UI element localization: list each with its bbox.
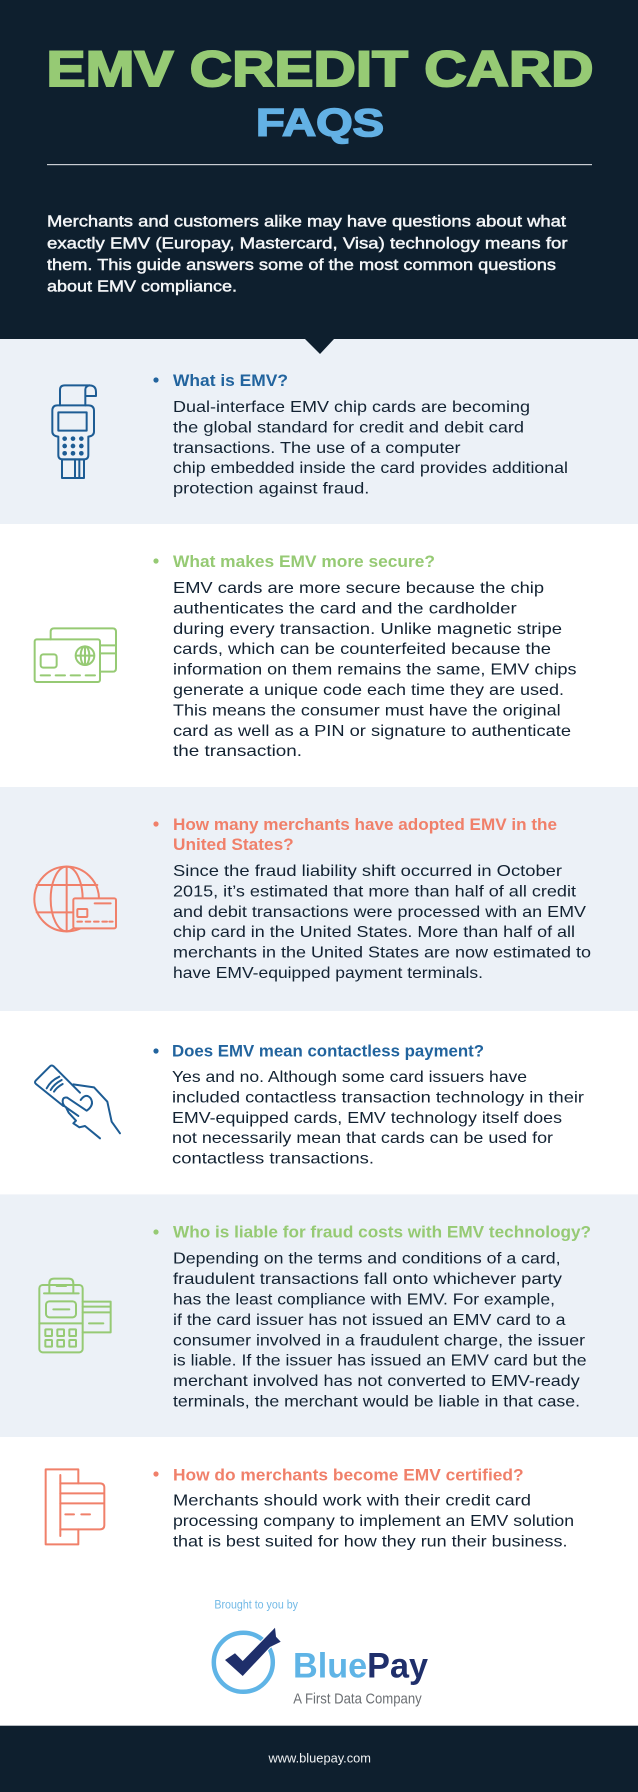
heading: What is EMV? [173,372,288,390]
icon: globe with card [34,867,116,931]
answer text: transactions. The use of a computer [173,440,461,457]
answer text: merchant involved has not converted to EMV-ready [173,1373,580,1390]
footer [0,1726,638,1792]
heading: What makes EMV more secure? [173,553,435,571]
answer text: included contactless transaction technology in their [172,1089,585,1106]
answer text: Depending on the terms and conditions of a card, [173,1251,561,1268]
icon: card terminal with card [39,1279,111,1352]
answer text: consumer involved in a fraudulent charge, the issuer [173,1332,586,1349]
answer text: processing company to implement an EMV solution [173,1513,574,1530]
answer text [173,399,568,498]
answer text: information on them remains the same, EMV chips [173,662,576,679]
panel: EMV certification [0,1437,638,1577]
answer text: not necessarily mean that cards can be used for [172,1130,554,1147]
answer text: 2015, it’s estimated that more than half of all credit [173,883,577,900]
answer text: has the least compliance with EMV. For example, [173,1292,555,1308]
answer text: fraudulent transactions fall onto whichever party [173,1271,562,1288]
subtitle: FAQS [256,102,384,145]
panel: what is EMV [0,339,638,524]
answer text: cards, which can be counterfeited because the [173,641,551,658]
answer text: if the card issuer has not issued an EMV card to a [173,1312,566,1329]
answer text: protection against fraud. [173,481,369,498]
answer text: EMV cards are more secure because the chip [173,580,544,597]
panel: header [0,0,638,339]
answer text: and debit transactions were processed with an EMV [173,904,586,921]
answer text: the global standard for credit and debit card [173,419,524,436]
icon: hand holding card [35,1065,120,1138]
answer text: Dual-interface EMV chip cards are becoming [173,399,530,416]
website: www.bluepay.com [267,1752,371,1766]
answer text: terminals, the merchant would be liable in that case. [173,1394,580,1410]
icon: payment terminal [52,385,96,478]
answer text: chip card in the United States. More than half of all [173,924,575,941]
answer text: chip embedded inside the card provides additional [173,460,568,477]
answer text: have EMV-equipped payment terminals. [173,965,483,982]
icon: card in reader [46,1469,104,1544]
panel: merchant adoption [0,787,638,1011]
intro paragraph: them. This guide answers some of the most common questions [47,257,556,274]
heading: Does EMV mean contactless payment? [172,1043,484,1061]
title: EMV CREDIT CARD [46,41,594,97]
panel: what makes EMV more secure [0,524,638,787]
intro paragraph: Merchants and customers alike may have questions about what [47,214,567,231]
answer text: that is best suited for how they run their business. [173,1534,568,1550]
answer text: merchants in the United States are now estimated to [173,945,591,962]
answer text: authenticates the card and the cardholder [173,600,517,617]
answer text [173,1493,574,1550]
tagline: A First Data Company [293,1690,422,1707]
heading: Who is liable for fraud costs with EMV technology? [173,1224,591,1242]
answer text [172,1069,585,1168]
answer text: contactless transactions. [172,1151,374,1168]
answer text: This means the consumer must have the original [173,702,561,719]
answer text [173,1251,587,1410]
answer text: Yes and no. Although some card issuers have [172,1069,527,1086]
answer text: generate a unique code each time they are used. [173,682,564,699]
answer text: during every transaction. Unlike magnetic stripe [173,621,562,638]
heading: United States? [173,836,294,854]
answer text: card as well as a PIN or signature to authenticate [173,723,571,740]
credit line: Brought to you by [214,1599,298,1611]
answer text: the transaction. [173,743,302,760]
answer text [173,863,591,982]
wordmark: BluePay [293,1646,429,1685]
answer text: EMV-equipped cards, EMV technology itself does [172,1110,562,1127]
heading [173,816,557,854]
answer text: is liable. If the issuer has issued an EMV card but the [173,1353,587,1370]
intro paragraph: about EMV compliance. [47,279,237,296]
heading: How many merchants have adopted EMV in the [173,816,557,834]
answer text: Since the fraud liability shift occurred in October [173,863,563,880]
arrow: header pointer [305,339,334,354]
panel: fraud liability [0,1194,638,1437]
heading: How do merchants become EMV certified? [173,1466,524,1484]
icon: check mark in ring [214,1628,281,1692]
answer text [173,580,576,760]
answer text: Merchants should work with their credit card [173,1493,531,1510]
icon: credit cards [35,628,116,682]
logo: BluePay [214,1628,429,1707]
panel: contactless payment [0,1011,638,1194]
intro paragraph: exactly EMV (Europay, Mastercard, Visa) technology means for [47,235,568,252]
intro paragraph [47,214,568,296]
